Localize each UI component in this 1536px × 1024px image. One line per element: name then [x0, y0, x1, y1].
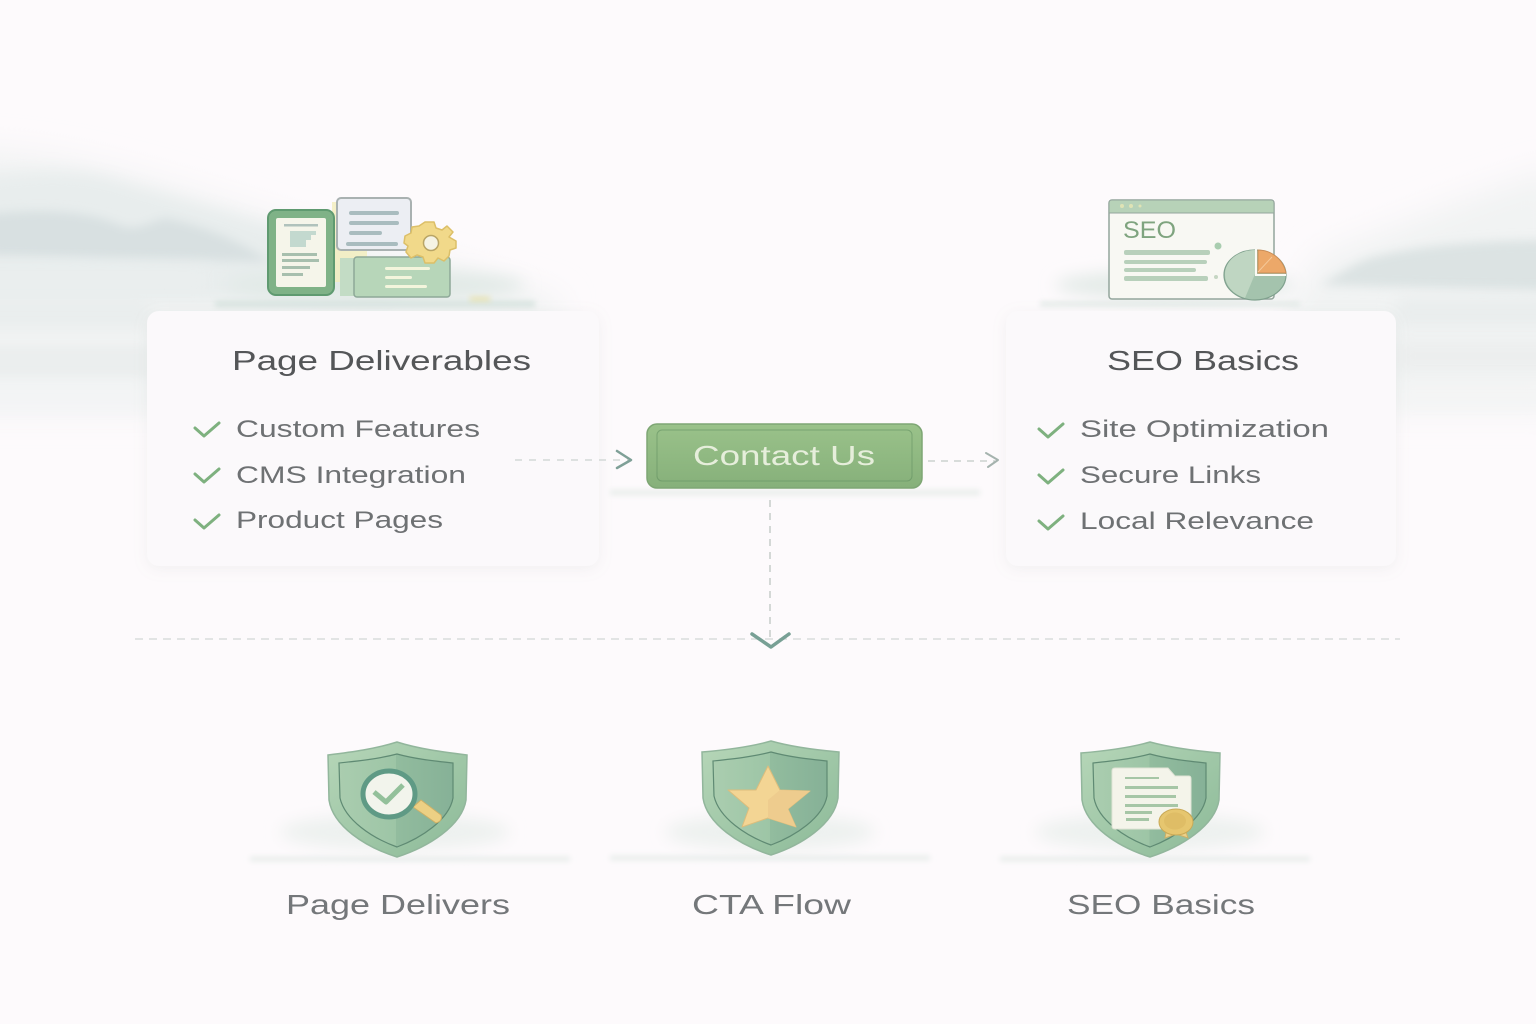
panel: SEO basics — [1006, 311, 1396, 566]
button: contact us — [610, 424, 980, 495]
outcome: page delivers — [250, 742, 570, 920]
list item: secure links: Secure Links — [1080, 462, 1261, 489]
label: SEO basics: SEO Basics — [1067, 889, 1255, 920]
heading: page deliverables: Page Deliverables — [232, 345, 531, 376]
list item: product pages — [195, 507, 443, 534]
panel: page deliverables — [147, 311, 599, 566]
list item: site optimization — [1039, 416, 1329, 443]
icon: award seal — [1159, 809, 1193, 838]
icon: shield with magnifier — [328, 742, 467, 857]
list item: CMS integration — [195, 462, 466, 489]
list item: product pages: Product Pages — [236, 507, 443, 534]
outcome: SEO basics — [1000, 742, 1310, 920]
outcome: CTA flow — [610, 741, 930, 920]
arrow: contact us to SEO basics — [928, 453, 998, 467]
icon: shield with certificate — [1081, 742, 1220, 857]
list item: custom features: Custom Features — [236, 416, 480, 443]
background: right misty hills — [1280, 168, 1536, 410]
list item: secure links — [1039, 462, 1261, 489]
heading: SEO basics: SEO Basics — [1107, 345, 1299, 376]
background: left misty hills — [0, 150, 560, 410]
list item: CMS integration: CMS Integration — [236, 462, 466, 489]
list item: local relevance: Local Relevance — [1080, 508, 1314, 535]
list item: local relevance — [1039, 508, 1314, 535]
text: SEO: SEO — [1123, 217, 1176, 244]
icon: SEO browser window with pie chart — [1040, 200, 1300, 306]
label: CTA flow: CTA Flow — [692, 889, 852, 920]
arrow: contact us down to outcomes — [135, 500, 1400, 647]
icon: page deliverables illustration — [215, 198, 535, 307]
arrow: page deliverables to contact us — [515, 451, 631, 468]
list item: site optimization: Site Optimization — [1080, 416, 1329, 443]
icon: gear — [404, 222, 456, 263]
pie chart — [1224, 249, 1286, 300]
list item: custom features — [195, 416, 480, 443]
icon: shield with star — [702, 741, 839, 855]
label: page delivers: Page Delivers — [286, 889, 510, 920]
button: contact us: Contact Us — [693, 440, 875, 471]
